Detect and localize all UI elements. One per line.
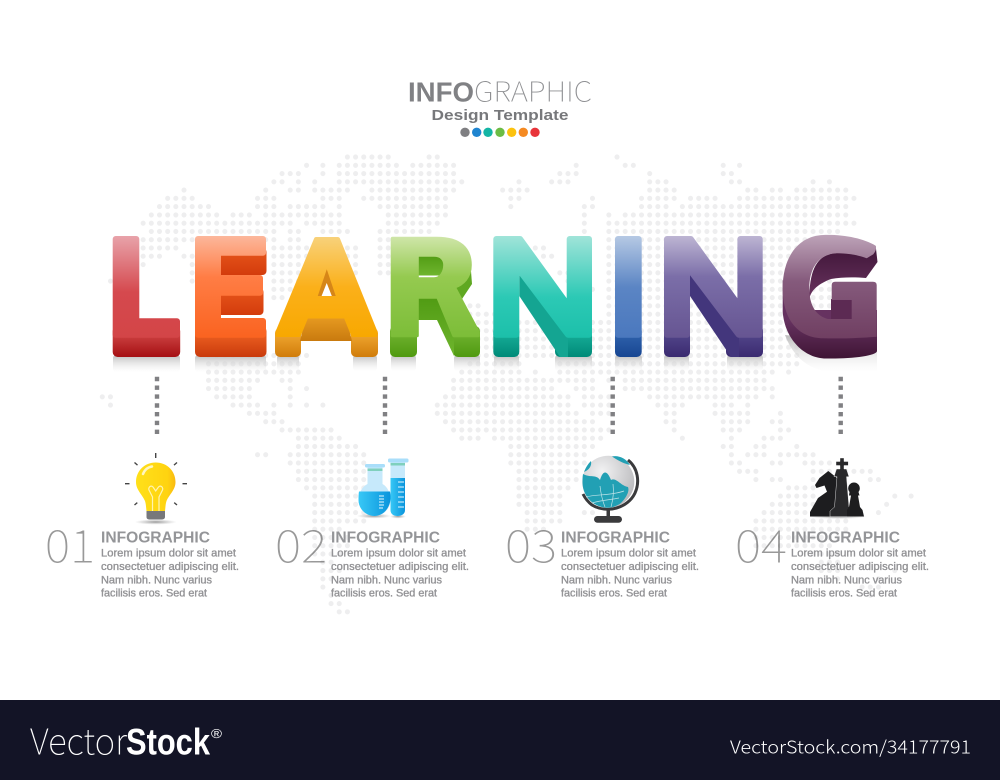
step 04 body: Lorem ipsum dolor sit amet bbox=[791, 548, 927, 560]
step 03 body: consectetuer adipiscing elit. bbox=[561, 561, 699, 573]
footer logo: Vector bbox=[30, 713, 128, 765]
letter reflections bbox=[113, 335, 877, 372]
colour dots row bbox=[460, 128, 540, 137]
icon: light bulb bbox=[125, 453, 187, 525]
letter I bbox=[615, 239, 642, 357]
letter G bbox=[783, 235, 878, 359]
step 02 text bbox=[331, 530, 469, 600]
step 03 text bbox=[561, 530, 699, 600]
step 01 body: consectetuer adipiscing elit. bbox=[101, 561, 239, 573]
step 02 body bbox=[331, 548, 469, 600]
icon: flask and test tube bbox=[357, 458, 408, 518]
footer bar bbox=[0, 700, 1000, 780]
footer logo: Stock bbox=[126, 721, 210, 762]
title line: INFOGRAPHIC bbox=[408, 70, 592, 110]
step 03 body: Lorem ipsum dolor sit amet bbox=[561, 548, 697, 560]
step 01 body: Lorem ipsum dolor sit amet bbox=[101, 548, 237, 560]
step 02 body: facilisis eros. Sed erat bbox=[331, 588, 438, 600]
step 01 heading: INFOGRAPHIC bbox=[101, 530, 210, 547]
second letter N bbox=[664, 239, 763, 357]
numerals 01 to 04 bbox=[45, 510, 787, 576]
title line: INFOGRAPHIC: GRAPHIC bbox=[474, 70, 592, 110]
subtitle: Design Template bbox=[432, 108, 568, 124]
step 01 body bbox=[101, 548, 239, 600]
letter L bbox=[113, 239, 180, 357]
step 04 body bbox=[791, 548, 929, 600]
step 03 body: facilisis eros. Sed erat bbox=[561, 588, 668, 600]
title bbox=[408, 70, 592, 137]
numerals 01 to 04: 04 bbox=[735, 510, 787, 576]
step 04 heading: INFOGRAPHIC bbox=[791, 530, 900, 547]
step 04 body: Nam nibh. Nunc varius bbox=[791, 574, 902, 586]
step 01 body: Nam nibh. Nunc varius bbox=[101, 574, 212, 586]
letter A bbox=[275, 239, 378, 357]
step 03 body bbox=[561, 548, 699, 600]
step 02 body: Lorem ipsum dolor sit amet bbox=[331, 548, 467, 560]
step 04 body: consectetuer adipiscing elit. bbox=[791, 561, 929, 573]
numerals 01 to 04: 01 bbox=[45, 510, 95, 576]
letter R bbox=[390, 238, 480, 357]
step 04 text bbox=[791, 530, 929, 600]
step 03 body: Nam nibh. Nunc varius bbox=[561, 574, 672, 586]
step 01 text bbox=[101, 530, 239, 600]
numerals 01 to 04: 02 bbox=[275, 510, 327, 576]
footer image id: VectorStock.com/34177791 bbox=[730, 733, 971, 759]
icon: chess pieces bbox=[809, 458, 867, 519]
dotted world map background bbox=[102, 157, 911, 612]
step 03 heading: INFOGRAPHIC bbox=[561, 530, 670, 547]
icon: globe bbox=[582, 456, 638, 523]
numerals 01 to 04: 03 bbox=[505, 510, 557, 576]
letter N bbox=[493, 239, 592, 357]
step 02 body: consectetuer adipiscing elit. bbox=[331, 561, 469, 573]
title line: INFOGRAPHIC: INFO bbox=[408, 77, 474, 108]
letter E bbox=[195, 239, 266, 357]
3D word LEARNING bbox=[113, 235, 877, 359]
footer logo bbox=[30, 713, 222, 765]
footer logo: ® bbox=[211, 726, 222, 741]
step 02 body: Nam nibh. Nunc varius bbox=[331, 574, 442, 586]
step 04 body: facilisis eros. Sed erat bbox=[791, 588, 898, 600]
dotted connector lines bbox=[155, 377, 843, 434]
step 01 body: facilisis eros. Sed erat bbox=[101, 588, 208, 600]
step 02 heading: INFOGRAPHIC bbox=[331, 530, 440, 547]
